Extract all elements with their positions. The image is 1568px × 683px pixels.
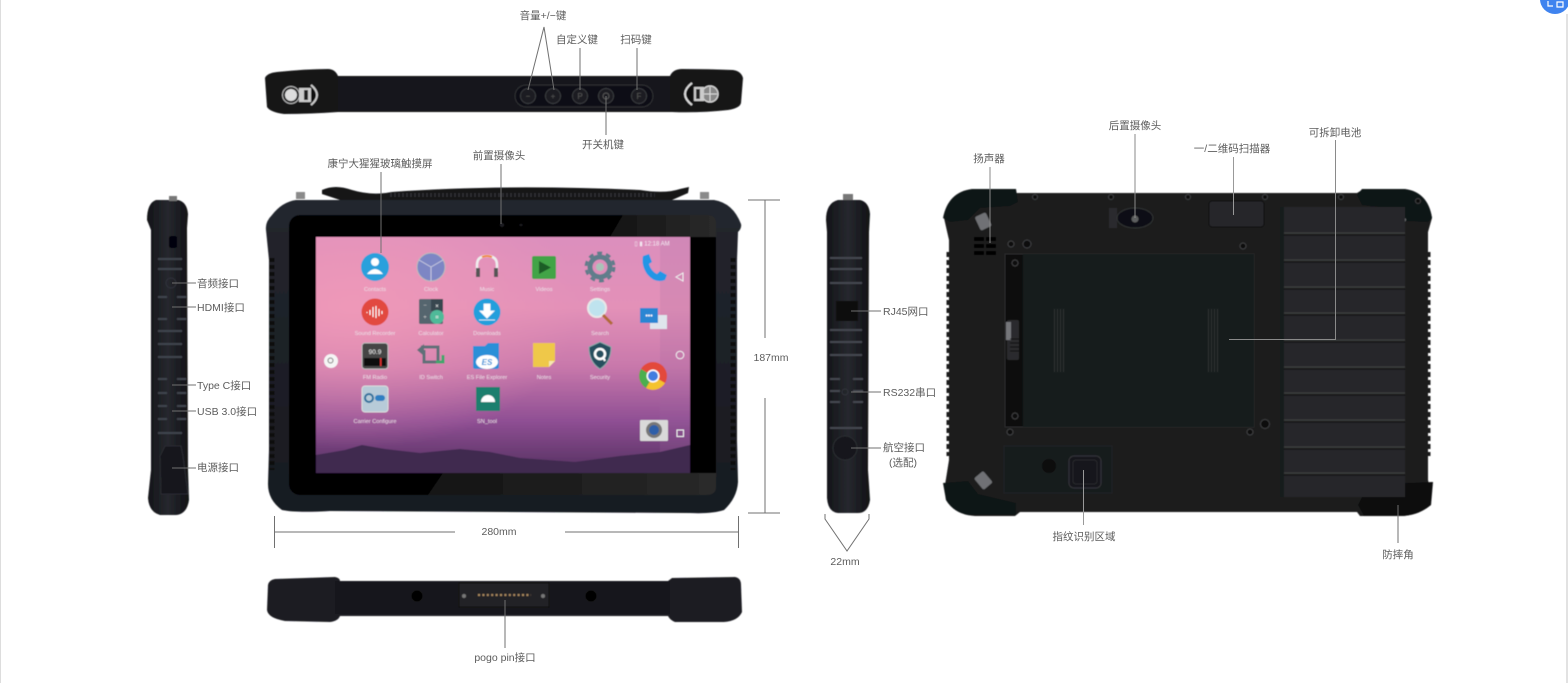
app: Chrome <box>639 362 667 390</box>
button: scan F: F <box>637 92 642 101</box>
app: ES File Explorer <box>467 343 507 381</box>
label: audio port <box>172 277 239 290</box>
187mm height dimension: 187mm <box>753 352 789 364</box>
bottom view of tablet <box>267 577 742 622</box>
grip lines right <box>1208 309 1218 372</box>
button: volume plus <box>546 88 560 104</box>
app: Videos <box>532 256 556 293</box>
label: barcode scanner <box>1194 142 1271 215</box>
side bumps <box>949 252 1428 456</box>
label: USB 3.0 port: USB 3.0接口 <box>197 405 257 418</box>
ribbed heat sink <box>1280 207 1405 497</box>
app: Clock: Clock <box>424 287 438 293</box>
label: aviation connector: 航空接口 <box>883 441 925 454</box>
app: FM Radio <box>362 343 388 381</box>
app: Search <box>588 299 612 337</box>
app: Security: Security <box>590 375 610 381</box>
side grip ridges <box>272 258 733 470</box>
rugged case <box>266 200 741 513</box>
bezel glare top <box>610 215 716 237</box>
label: front camera: 前置摄像头 <box>473 149 525 162</box>
app: Messages <box>640 308 667 329</box>
label: HDMI port <box>172 301 245 314</box>
app: Videos: Videos <box>535 287 553 293</box>
label: RJ45 port <box>851 306 929 318</box>
label: speaker: 扬声器 <box>973 152 1005 165</box>
app: Messages: ••• <box>645 313 653 320</box>
button: scan F <box>632 88 646 104</box>
app: SN_tool: SN_tool <box>477 419 497 425</box>
app: Calculator: − <box>423 303 427 309</box>
speaker grille <box>974 237 996 255</box>
button: custom P <box>572 88 588 104</box>
label: power port: 电源接口 <box>197 461 239 474</box>
app: ES File Explorer: ES File Explorer <box>467 375 507 381</box>
app: Notes <box>533 343 555 381</box>
nav: recent <box>677 430 684 436</box>
front camera <box>500 223 522 227</box>
label: removable battery <box>1229 126 1362 340</box>
app: Contacts <box>361 253 389 293</box>
app: ID Switch <box>417 344 443 381</box>
app: Settings <box>586 253 614 293</box>
button: power <box>598 88 614 104</box>
rear camera <box>1109 208 1153 228</box>
black bezel <box>289 215 716 495</box>
button: volume minus <box>520 88 536 104</box>
icon: translate badge <box>1540 0 1568 14</box>
status bar: ▯ ▮ 12:18 AM <box>634 242 670 248</box>
app: Sound Recorder <box>355 298 395 337</box>
left side view <box>147 196 189 515</box>
app: ID Switch: ID Switch <box>419 375 443 381</box>
label: Type C port <box>172 379 251 392</box>
app: FM Radio: 90.9 <box>369 349 382 356</box>
app: Contacts: Contacts <box>364 287 386 293</box>
label: drop protection corner <box>1382 505 1414 561</box>
right side view <box>826 194 870 513</box>
app: Calculator: = <box>435 315 439 321</box>
label: pogo pin <box>474 600 536 664</box>
latches <box>974 212 1407 490</box>
pogo pin connector <box>459 583 549 607</box>
app: Phone <box>642 254 667 281</box>
corner bumper bottom-left <box>943 481 1016 515</box>
app: Downloads <box>473 298 501 337</box>
bezel glare bottom <box>428 473 716 495</box>
app: Search: Search <box>591 331 609 337</box>
app: Calculator: + <box>423 315 427 321</box>
label: pogo pin: pogo pin接口 <box>474 651 536 664</box>
label: volume keys: 音量+/−键 <box>520 9 567 22</box>
label: audio port: 音频接口 <box>197 277 239 290</box>
corner bumper bottom-right <box>1358 482 1433 516</box>
front view of tablet <box>266 187 741 513</box>
mounting hole right <box>586 590 596 602</box>
barcode scanner window <box>1209 201 1264 227</box>
label: power port <box>172 461 239 474</box>
label: scan key: 扫码键 <box>620 33 652 46</box>
app: SN_tool <box>476 387 500 425</box>
label: RS232 port: RS232串口 <box>883 387 936 399</box>
label: aviation connector: (选配) <box>889 456 917 469</box>
app: Sound Recorder: Sound Recorder <box>355 331 395 337</box>
label: removable battery: 可拆卸电池 <box>1309 126 1362 139</box>
fingerprint area <box>1004 446 1112 493</box>
app: Calculator: × <box>435 304 439 310</box>
app: Camera <box>640 420 668 441</box>
app: ES File Explorer: ES <box>482 358 493 367</box>
screws <box>1007 194 1420 435</box>
label: volume keys <box>520 9 567 90</box>
label: power key: 开关机键 <box>582 138 624 151</box>
app: Calculator <box>418 299 444 337</box>
label: USB 3.0 port <box>172 405 257 418</box>
battery cover <box>1005 254 1254 427</box>
right page edge <box>1566 14 1568 683</box>
screen <box>316 237 690 473</box>
app: FM Radio: FM Radio <box>363 375 387 381</box>
label: RS232 port <box>851 387 936 399</box>
nav: back <box>676 273 683 281</box>
label: speaker <box>973 152 1005 243</box>
280mm width dimension: 280mm <box>481 526 517 538</box>
grip lines left <box>1054 309 1064 372</box>
app: Music: Music <box>480 287 495 293</box>
label: scan key <box>620 33 652 90</box>
app: Notes: Notes <box>537 375 552 381</box>
label: front camera <box>473 149 525 224</box>
app: Clock <box>417 253 445 293</box>
carrying strap <box>296 187 709 200</box>
label: power key <box>582 96 624 151</box>
label: barcode scanner: 一/二维码扫描器 <box>1194 142 1271 155</box>
app: Security <box>589 342 611 381</box>
battery latch <box>1006 320 1019 360</box>
label: custom key <box>556 33 598 90</box>
22mm depth dimension: 22mm <box>830 556 860 568</box>
label: custom key: 自定义键 <box>556 33 598 46</box>
label: HDMI port: HDMI接口 <box>197 301 245 314</box>
label: fingerprint area <box>1052 470 1116 543</box>
280mm width dimension <box>274 516 738 548</box>
app: Music <box>476 256 498 293</box>
label: rear camera: 后置摄像头 <box>1109 119 1161 132</box>
app: Settings: Settings <box>590 287 610 293</box>
search button <box>324 354 338 368</box>
corner bumper top-right <box>1357 189 1432 222</box>
label: RJ45 port: RJ45网口 <box>883 306 929 318</box>
187mm height dimension <box>748 200 789 513</box>
strap buckle right <box>685 83 718 105</box>
button: volume plus: + <box>551 92 556 101</box>
label: glass touch screen <box>328 157 432 253</box>
button: volume minus: − <box>526 92 531 101</box>
app: Carrier Configure <box>354 386 396 425</box>
button: custom P: P <box>577 92 583 101</box>
label: rear camera <box>1109 119 1161 218</box>
mounting hole left <box>412 590 422 602</box>
top view of tablet <box>265 69 743 114</box>
wallpaper mountains <box>316 445 690 473</box>
nav: home <box>676 351 684 359</box>
label: glass touch screen: 康宁大猩猩玻璃触摸屏 <box>328 157 432 170</box>
22mm depth dimension <box>825 514 869 568</box>
app: Downloads: Downloads <box>473 331 501 337</box>
strap buckle left <box>282 85 317 105</box>
label: fingerprint area: 指纹识别区域 <box>1052 530 1116 543</box>
left page edge <box>0 0 1 683</box>
label: drop protection corner: 防摔角 <box>1382 548 1414 561</box>
back view of tablet <box>943 189 1433 516</box>
app: Calculator: Calculator <box>418 331 444 337</box>
app: Carrier Configure: Carrier Configure <box>354 419 396 425</box>
label: aviation connector <box>851 441 925 469</box>
corner bumper top-left <box>943 189 1018 222</box>
label: Type C port: Type C接口 <box>197 379 251 392</box>
